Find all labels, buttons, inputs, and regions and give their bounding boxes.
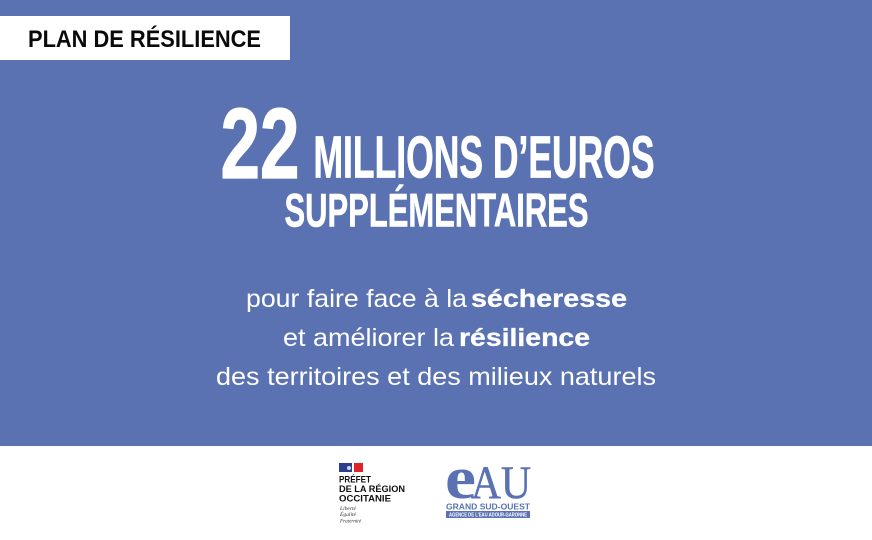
logotype: eAU: AU bbox=[471, 457, 531, 509]
icon: french flag mark bbox=[339, 463, 363, 472]
text block: description: et améliorer la bbox=[283, 324, 454, 352]
title: 22 millions d'euros supplémentaires bbox=[220, 88, 654, 236]
title: 22 millions d'euros supplémentaires: SUPPLÉMENTAIRES bbox=[284, 184, 588, 236]
text block: description: pour faire face à la bbox=[246, 285, 467, 313]
text: préfet: PRÉFET bbox=[339, 474, 371, 484]
text block: description bbox=[216, 285, 656, 391]
title: 22 millions d'euros supplémentaires: MILLIONS D’EUROS bbox=[314, 124, 654, 190]
text block: description: sécheresse bbox=[471, 285, 627, 313]
text: préfet: DE LA RÉGION bbox=[339, 484, 405, 494]
title: 22 millions d'euros supplémentaires: 22 bbox=[220, 88, 300, 200]
text: devise: Égalité bbox=[339, 510, 357, 518]
text: préfet: OCCITANIE bbox=[339, 494, 391, 504]
panel: white footer bbox=[0, 446, 872, 540]
heading tag: plan de résilience: PLAN DE RÉSILIENCE bbox=[28, 25, 261, 53]
logo: préfet de la région Occitanie bbox=[339, 463, 405, 524]
logotype: eAU bbox=[445, 445, 531, 511]
text: devise bbox=[339, 506, 362, 524]
text block: description: résilience bbox=[459, 324, 590, 352]
text block: description: des territoires et des milieux naturels bbox=[216, 363, 656, 391]
text: grand sud-ouest: GRAND SUD-OUEST bbox=[446, 502, 531, 512]
logotype: eAU: e bbox=[445, 445, 476, 511]
heading tag: plan de résilience bbox=[0, 16, 290, 60]
text: préfet bbox=[339, 474, 405, 504]
logo: eau grand sud-ouest bbox=[445, 445, 531, 518]
text: devise: Fraternité bbox=[339, 518, 362, 524]
text: devise: Liberté bbox=[339, 506, 357, 512]
label: agence de l'eau adour-garonne: AGENCE DE L’EAU ADOUR-GARONNE bbox=[449, 512, 528, 518]
